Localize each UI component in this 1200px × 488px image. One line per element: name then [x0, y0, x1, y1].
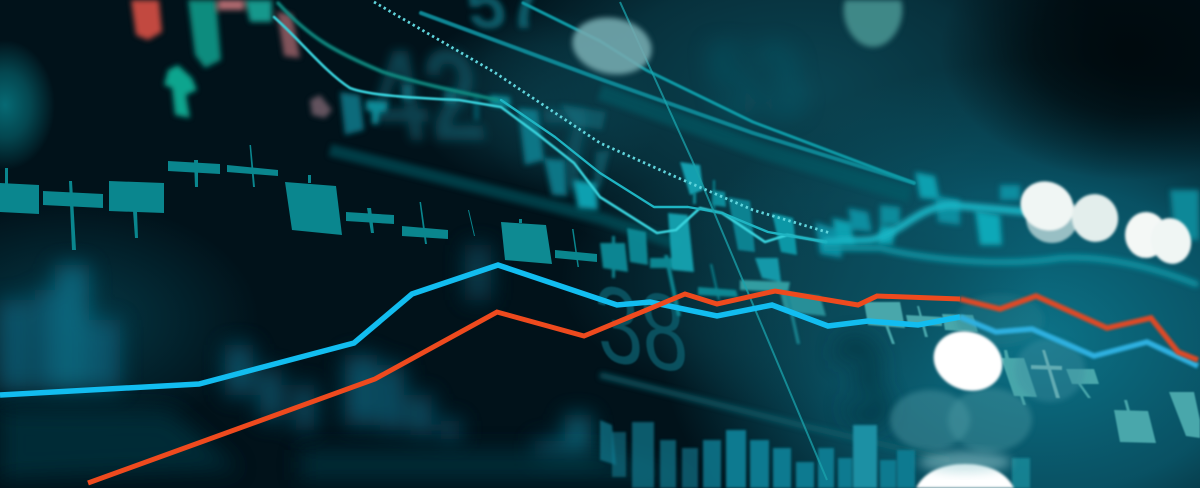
soft halo over lower white light	[919, 451, 1011, 473]
blurred background numerals: 7	[533, 85, 610, 215]
dotted moving average line	[374, 2, 830, 233]
blurred band across lower left	[0, 410, 700, 480]
blurred background bars: lower left	[0, 245, 591, 460]
blurred background numerals	[357, 22, 610, 215]
numerals: 3 lower right: 3	[825, 312, 900, 452]
blurred wide bands	[330, 92, 950, 460]
lower right pale candlesticks	[864, 302, 1200, 443]
blurred background numerals: 42	[357, 22, 494, 168]
dim bokeh lights	[568, 0, 1085, 452]
thin diagonal line	[620, 2, 827, 480]
teal upper trend lines	[274, 3, 1196, 284]
lower right bar chart	[600, 420, 1030, 488]
numerals: 38: 38	[590, 261, 693, 396]
top left blurred candlesticks: red and green	[131, 0, 332, 118]
right blurred candlesticks	[815, 172, 1199, 258]
red data line	[88, 291, 1198, 483]
numerals: 53: 53	[699, 23, 814, 138]
crisp candlesticks row	[0, 145, 597, 267]
upper blurred candlesticks	[340, 85, 610, 210]
bright white bokeh lights	[916, 173, 1196, 488]
mid candlesticks cluster	[600, 162, 826, 344]
blue data line	[0, 265, 1198, 395]
